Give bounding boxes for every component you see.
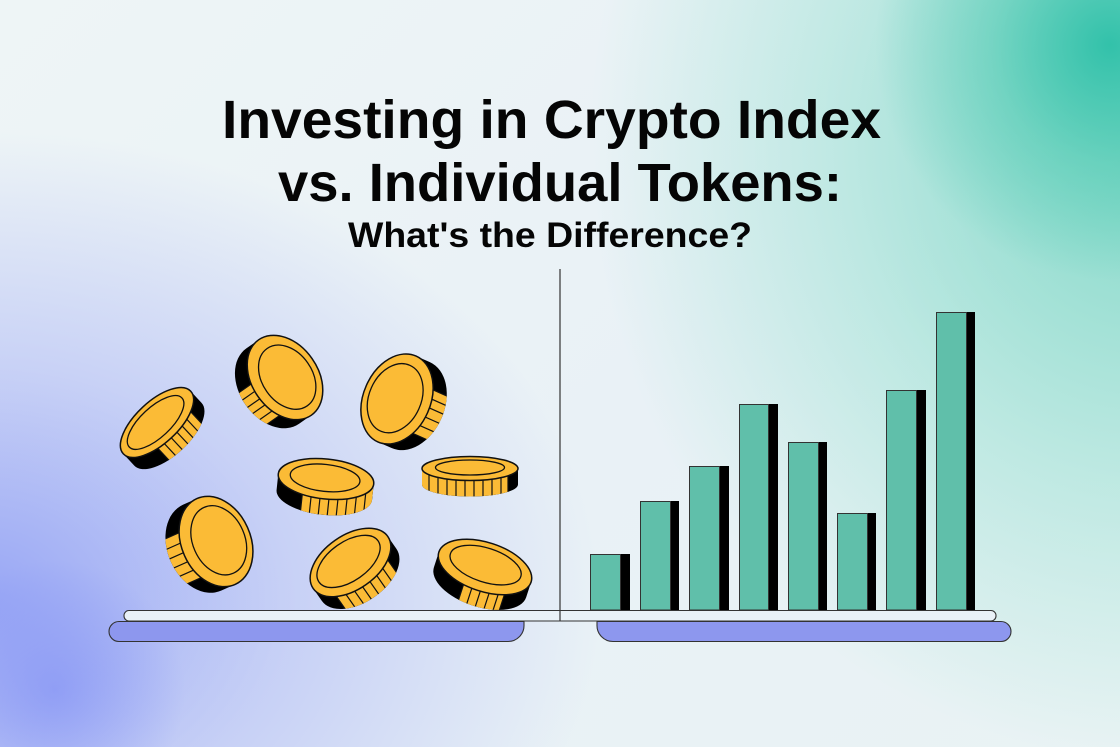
bar 7 xyxy=(886,390,926,610)
subtitle: What's the Difference? xyxy=(348,216,752,255)
coin 7 xyxy=(309,528,400,609)
scale platform xyxy=(109,610,1011,642)
coin 3 xyxy=(360,353,447,450)
bar 2 xyxy=(640,501,679,610)
bar 4 xyxy=(740,404,778,610)
title xyxy=(222,90,881,255)
bar 6 xyxy=(838,513,876,610)
bar 1 xyxy=(590,554,630,610)
coin 6 xyxy=(165,496,254,593)
coin 1 xyxy=(120,386,204,470)
coin 4 xyxy=(276,458,374,516)
center divider line xyxy=(559,269,561,621)
shelf divider tick xyxy=(559,610,561,621)
title line 1: Investing in Crypto Index xyxy=(222,90,881,150)
bar 5 xyxy=(788,442,827,610)
top shelf xyxy=(124,610,996,621)
bar chart xyxy=(590,312,975,610)
bar 3 xyxy=(690,466,729,610)
title line 2: vs. Individual Tokens: xyxy=(278,153,842,213)
right tray xyxy=(597,622,1011,642)
coin 5 xyxy=(422,456,518,500)
coin 8 xyxy=(433,538,532,610)
left tray xyxy=(109,622,524,642)
falling coins xyxy=(120,334,532,610)
bar 8 xyxy=(936,312,975,610)
coin 2 xyxy=(234,334,324,428)
